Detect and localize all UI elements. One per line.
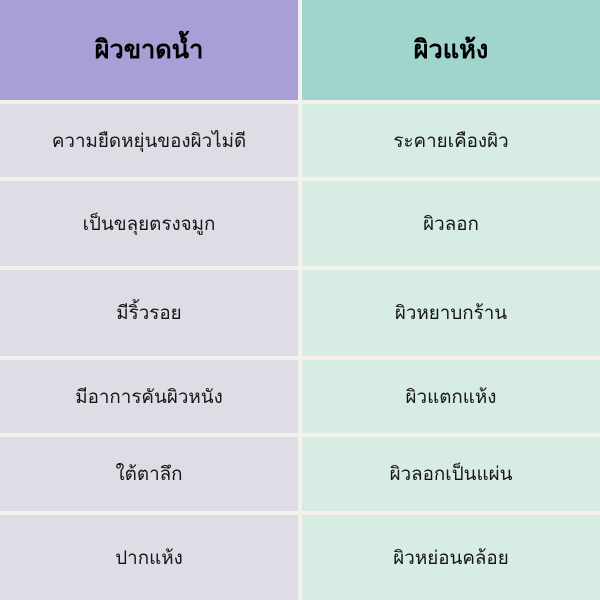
row 6 left cell: ปากแห้ง bbox=[115, 546, 183, 568]
row 5 right cell: ผิวลอกเป็นแผ่น bbox=[390, 463, 512, 484]
row 6 right cell: ผิวหย่อนคล้อย bbox=[393, 546, 509, 568]
row 1 right cell: ระคายเคืองผิว bbox=[393, 130, 509, 150]
header: dehydrated skin: ผิวขาดน้ำ bbox=[95, 36, 203, 64]
row 1 left cell: ความยืดหยุ่นของผิวไม่ดี bbox=[52, 130, 246, 150]
header: dehydrated skin bbox=[0, 0, 298, 100]
row 3 right cell: ผิวหยาบกร้าน bbox=[395, 302, 507, 323]
row 4 right cell bbox=[302, 360, 600, 433]
row 1 left cell bbox=[0, 104, 298, 177]
row 6 right cell bbox=[302, 515, 600, 600]
row 4 right cell: ผิวแตกแห้ง bbox=[406, 386, 496, 406]
row 2 right cell: ผิวลอก bbox=[423, 212, 479, 234]
row 3 left cell: มีริ้วรอย bbox=[116, 302, 182, 323]
row 6 left cell bbox=[0, 515, 298, 600]
row 4 left cell: มีอาการคันผิวหนัง bbox=[75, 386, 223, 406]
row 2 right cell bbox=[302, 181, 600, 266]
row 3 left cell bbox=[0, 270, 298, 356]
row 2 left cell bbox=[0, 181, 298, 266]
row 3 right cell bbox=[302, 270, 600, 356]
row 2 left cell: เป็นขลุยตรงจมูก bbox=[83, 212, 215, 234]
row 5 right cell bbox=[302, 437, 600, 511]
row 5 left cell bbox=[0, 437, 298, 511]
row 1 right cell bbox=[302, 104, 600, 177]
row 5 left cell: ใต้ตาลึก bbox=[116, 463, 182, 484]
header: dry skin: ผิวแห้ง bbox=[414, 36, 488, 64]
header: dry skin bbox=[302, 0, 600, 100]
row 4 left cell bbox=[0, 360, 298, 433]
